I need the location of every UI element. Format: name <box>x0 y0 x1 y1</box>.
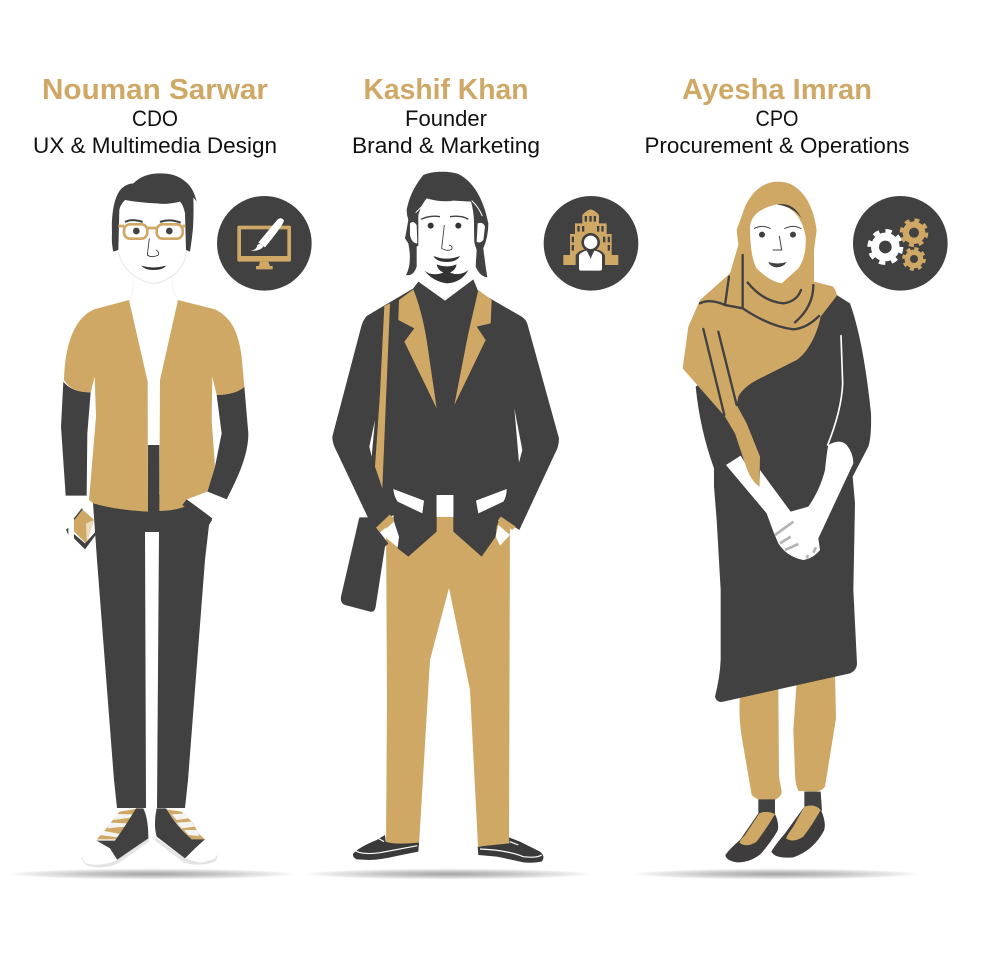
heading: Ayesha Imran <box>644 74 910 158</box>
trousers <box>93 495 212 808</box>
heading: Ayesha Imran: Procurement & Operations <box>644 133 910 158</box>
heading: Nouman Sarwar: CDO <box>132 106 178 131</box>
figure: man with glasses <box>61 173 248 867</box>
heading: Kashif Khan: Brand & Marketing <box>352 133 540 158</box>
cuffs and hands <box>376 514 516 533</box>
icon: building and person <box>544 196 638 291</box>
cardigan <box>64 300 244 512</box>
pocket and hand <box>187 492 227 518</box>
icon: gears <box>853 196 948 291</box>
panel: Kashif Khan <box>302 74 638 880</box>
headscarf <box>683 182 837 487</box>
head <box>112 173 197 300</box>
panel: Nouman Sarwar <box>6 74 312 880</box>
heading: Nouman Sarwar <box>33 74 277 158</box>
trousers and shoes <box>725 675 836 862</box>
shoes <box>82 808 218 867</box>
sleeve seam <box>828 336 843 445</box>
ground shadow <box>6 868 298 880</box>
ground shadow <box>302 868 594 880</box>
hair and face <box>405 172 488 285</box>
trousers <box>386 517 510 846</box>
dress <box>696 295 871 702</box>
jacket <box>332 279 559 557</box>
scarf folds <box>700 255 819 415</box>
heading: Nouman Sarwar: UX & Multimedia Design <box>33 133 277 158</box>
arms and hands <box>726 442 853 560</box>
lapels <box>398 289 492 408</box>
panel: Ayesha Imran <box>630 74 948 880</box>
shoes <box>353 835 543 863</box>
figure: woman in hijab <box>683 182 871 862</box>
trouser waist <box>148 445 159 515</box>
heading: Ayesha Imran: CPO <box>756 106 798 131</box>
phone <box>66 509 96 549</box>
white belt gap <box>437 495 453 517</box>
sleeves <box>61 382 248 499</box>
icon: monitor and paintbrush <box>217 196 312 291</box>
face <box>750 204 806 283</box>
heading: Kashif Khan <box>352 74 540 158</box>
ground shadow <box>630 868 922 880</box>
figure: man with goatee <box>332 172 559 863</box>
heading: Kashif Khan: Founder <box>405 106 487 131</box>
bag strap <box>375 303 390 488</box>
heading: Ayesha Imran: Ayesha Imran <box>682 74 872 106</box>
jacket slits and pockets <box>369 408 522 513</box>
heading: Kashif Khan: Kashif Khan <box>364 74 528 106</box>
bag <box>341 517 388 612</box>
heading: Nouman Sarwar: Nouman Sarwar <box>42 74 268 106</box>
